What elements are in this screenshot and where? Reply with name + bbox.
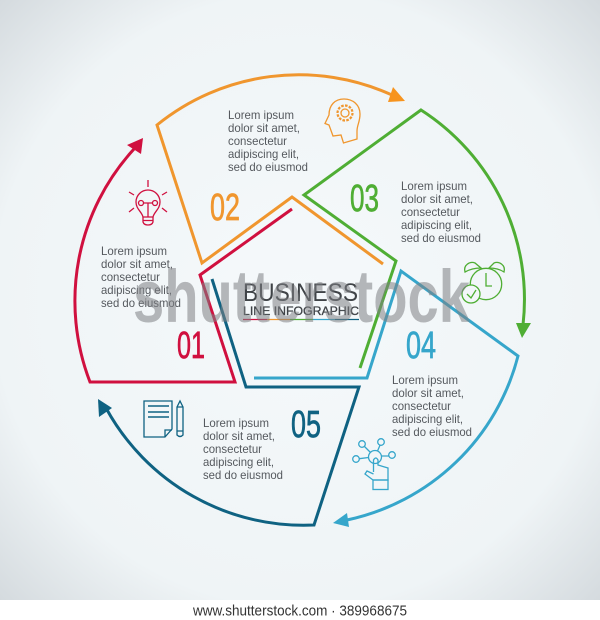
text block 05: sed do eiusmod — [203, 468, 283, 482]
text block 03: consectetur — [401, 205, 460, 219]
text block 02: dolor sit amet, — [228, 121, 300, 135]
text block 02: adipiscing elit, — [228, 147, 299, 161]
icon: hand touching network — [353, 439, 395, 490]
number 02: 02 — [210, 187, 240, 229]
text block 04: sed do eiusmod — [392, 425, 472, 439]
text block 05: Lorem ipsum — [203, 416, 269, 430]
text block 04: Lorem ipsum — [392, 373, 458, 387]
text block 02: Lorem ipsum — [228, 108, 294, 122]
number 01: 01 — [177, 325, 205, 367]
number 04: 04 — [406, 325, 436, 367]
text block 05: dolor sit amet, — [203, 429, 275, 443]
text block 01: sed do eiusmod — [101, 296, 181, 310]
text block 05 — [203, 416, 283, 482]
text block 02: consectetur — [228, 134, 287, 148]
text block 04: dolor sit amet, — [392, 386, 464, 400]
title: business line infographic — [243, 279, 359, 320]
icon: alarm clock with check — [462, 262, 504, 303]
text block 01 — [101, 244, 181, 310]
icon: light bulb — [129, 180, 167, 225]
text block 03: Lorem ipsum — [401, 179, 467, 193]
footer bar — [0, 600, 600, 620]
watermark: shutterstock — [133, 255, 471, 338]
text block 02: sed do eiusmod — [228, 160, 308, 174]
text block 01: consectetur — [101, 270, 160, 284]
text block 04: adipiscing elit, — [392, 412, 463, 426]
title: business line infographic: BUSINESS — [243, 279, 358, 307]
segment 05: dark teal outline and arrow — [98, 279, 359, 525]
text block 04: consectetur — [392, 399, 451, 413]
text block 01: adipiscing elit, — [101, 283, 172, 297]
text block 03: adipiscing elit, — [401, 218, 472, 232]
text block 04 — [392, 373, 472, 439]
text block 03: dolor sit amet, — [401, 192, 473, 206]
number 03: 03 — [350, 178, 379, 220]
footer text: www.shutterstock.com · 389968675 — [192, 604, 407, 620]
text block 03: sed do eiusmod — [401, 231, 481, 245]
icon: note and pencil — [144, 401, 183, 437]
text block 05: adipiscing elit, — [203, 455, 274, 469]
title: business line infographic: LINE INFOGRAPHIC — [243, 304, 359, 318]
segment 03: green outline and arrow — [304, 110, 531, 368]
text block 03 — [401, 179, 481, 245]
icon: head with gear — [325, 99, 360, 143]
segment 04: blue outline and arrow — [254, 271, 518, 527]
number 05: 05 — [291, 404, 321, 446]
segment 02: orange outline and arrow — [157, 75, 405, 264]
segment 01: crimson outline and arrow — [75, 138, 292, 382]
text block 01: Lorem ipsum — [101, 244, 167, 258]
text block 05: consectetur — [203, 442, 262, 456]
text block 01: dolor sit amet, — [101, 257, 173, 271]
text block 02 — [228, 108, 308, 174]
